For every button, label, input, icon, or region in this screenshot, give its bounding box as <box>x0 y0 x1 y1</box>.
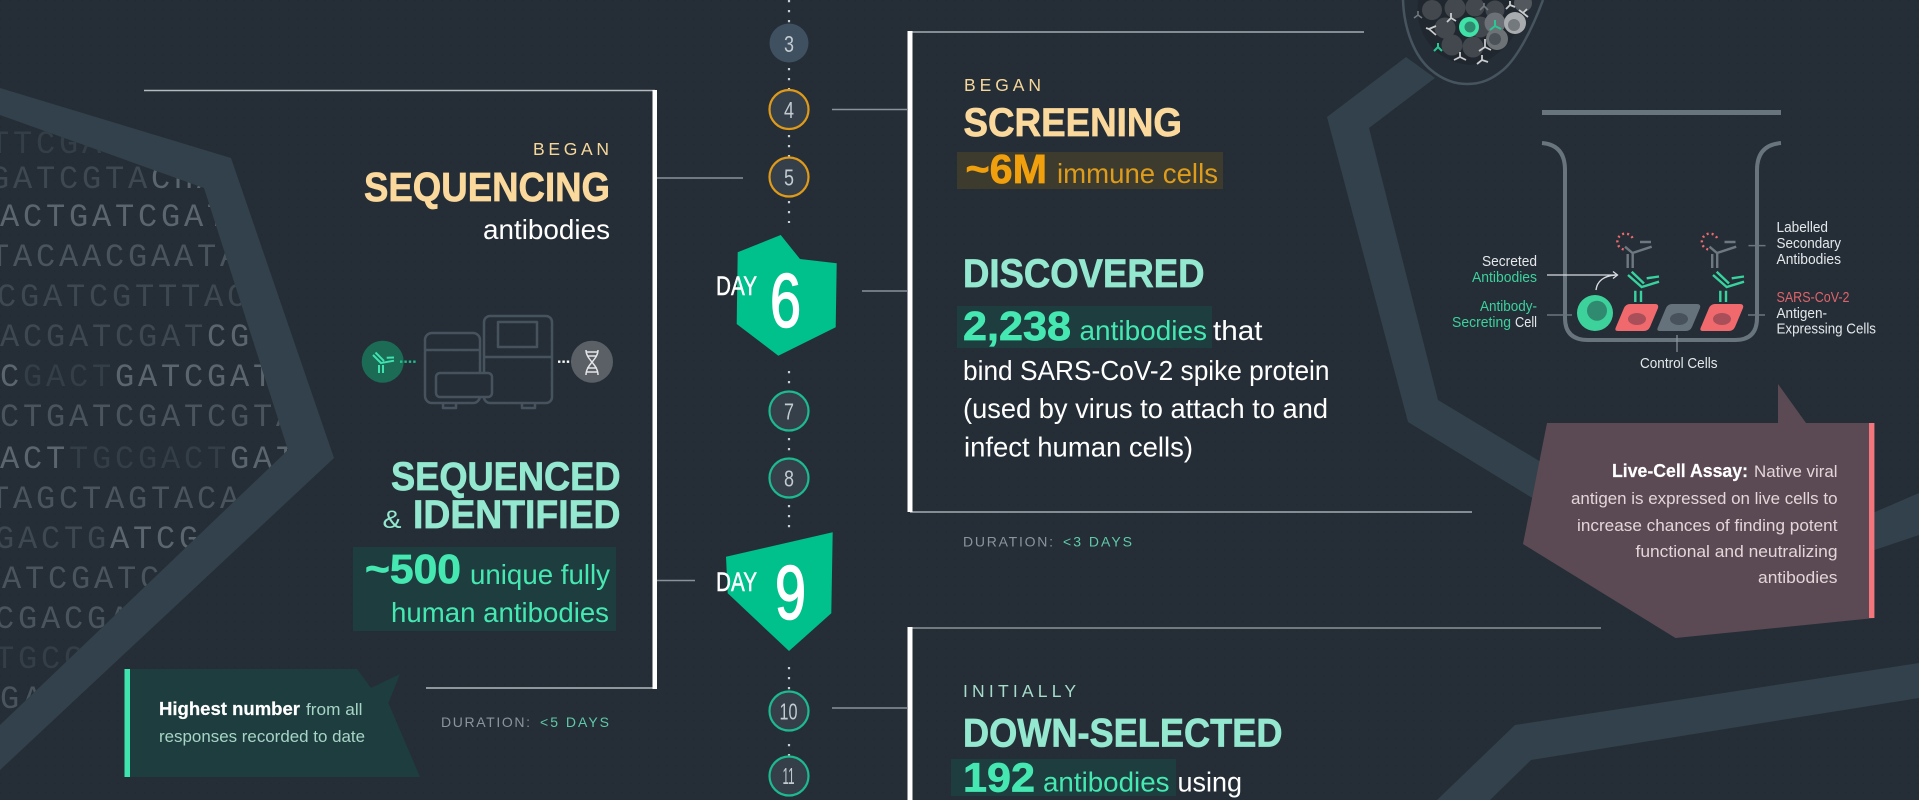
well lid <box>1542 110 1781 115</box>
label: secreted antibodies: Antibodies <box>1472 269 1537 286</box>
antibody-secreting cell <box>1577 275 1615 331</box>
duration: under 3 days: <3 DAYS <box>1063 534 1132 550</box>
label: antigen-expressing cells <box>1748 289 1876 338</box>
background band: right upper <box>1327 57 1919 606</box>
day 9 badge <box>716 532 833 651</box>
secondary antibodies <box>1625 242 1736 268</box>
label: antibody-secreting cell: Secreting <box>1452 314 1511 331</box>
label: antigen-expressing cells: SARS-CoV-2 <box>1776 289 1850 306</box>
duration: under 5 days: <5 DAYS <box>540 714 609 730</box>
DNA letters background: CTGATCGATCGTA <box>0 399 299 436</box>
text: spike protein description: that <box>1213 315 1263 346</box>
text: spike protein description: infect human cells) <box>964 432 1193 462</box>
label: labelled secondary antibodies <box>1748 219 1841 268</box>
DNA letters background: ACGATCGATCGT <box>0 319 276 356</box>
red labels on secondary antibodies <box>1617 234 1717 250</box>
callout: highest number <box>124 669 420 777</box>
DNA letters background: ACTTGCGACTGATC <box>0 441 322 478</box>
timeline dotted connectors <box>788 0 790 757</box>
day 5 marker <box>770 158 808 196</box>
heading: initially down-selected: INITIALLY <box>963 681 1076 701</box>
label: labelled secondary antibodies: Antibodies <box>1776 251 1841 268</box>
heading: sequenced and identified: SEQUENCED <box>391 455 620 499</box>
DNA letters background: ATCGATCC <box>2 561 186 598</box>
stat: 500 antibodies: human antibodies <box>391 597 609 628</box>
heading: began screening: SCREENING <box>964 101 1182 145</box>
label: labelled secondary antibodies: Labelled <box>1776 219 1828 236</box>
DNA letters background: CGATCGTTTACG <box>0 279 273 316</box>
label: control cells: Control Cells <box>1640 355 1718 372</box>
callout: live-cell assay: antibodies <box>1758 568 1838 587</box>
DNA letters background: ACTGATCGAT <box>0 199 230 236</box>
DNA letters background: GACTGATCGA <box>0 521 225 558</box>
day 10 marker: 10 <box>780 698 798 724</box>
day 7 marker <box>770 392 808 430</box>
heading: sequenced and identified <box>382 455 620 537</box>
heading: began sequencing: SEQUENCING <box>364 164 610 210</box>
label: labelled secondary antibodies: Secondary <box>1776 235 1841 252</box>
heading: began screening <box>964 75 1182 145</box>
heading: sequenced and identified: IDENTIFIED <box>413 493 620 537</box>
stat: 6M immune cells: ~6M <box>966 146 1047 192</box>
day 10 marker <box>770 692 808 730</box>
stat: 192 antibodies: antibodies <box>1043 766 1170 798</box>
text: spike protein description <box>963 315 1330 462</box>
label: antibody-secreting cell: Cell <box>1515 314 1537 331</box>
heading: sequenced and identified: & <box>382 506 402 534</box>
stat: 192 antibodies: 192 <box>963 754 1035 800</box>
stat: 192 antibodies: using <box>1178 766 1242 798</box>
stat: 2,238 antibodies: 2,238 <box>963 303 1071 349</box>
heading: began screening: BEGAN <box>964 75 1041 95</box>
day 11 marker <box>770 756 808 796</box>
timeline <box>716 0 837 796</box>
stat: 2,238 antibodies: antibodies <box>1080 315 1207 346</box>
label: antibody-secreting cell: Antibody- <box>1480 298 1537 315</box>
duration: under 5 days <box>441 714 609 730</box>
background band: left <box>0 88 334 770</box>
callout: live-cell assay: Native viral <box>1754 462 1838 481</box>
heading: began sequencing: BEGAN <box>533 139 609 159</box>
heading: initially down-selected <box>963 681 1282 756</box>
DNA letters background <box>0 132 288 708</box>
day 11 marker: 11 <box>782 763 794 789</box>
day 6 badge: 6 <box>770 259 801 344</box>
illustration: live-cell assay well <box>1452 110 1876 372</box>
green antibodies <box>1628 272 1744 302</box>
panel: screening and discovery <box>832 31 1472 550</box>
antigen-expressing cell 2 <box>1700 304 1743 331</box>
day 3 marker <box>770 24 808 62</box>
duration: under 5 days: DURATION: <box>441 714 530 730</box>
label: antibody-secreting cell <box>1452 298 1572 331</box>
text: spike protein description: bind SARS-CoV-2 spike protein <box>963 355 1330 386</box>
label: secreted antibodies <box>1472 253 1618 286</box>
duration: under 3 days: DURATION: <box>963 534 1053 550</box>
label: antigen-expressing cells: Antigen- <box>1776 305 1827 322</box>
day 7 marker: 7 <box>784 398 794 424</box>
callout: live-cell assay: antigen is expressed on live cells to <box>1571 489 1838 508</box>
well container <box>1542 143 1781 340</box>
day 8 marker <box>770 458 808 498</box>
callout: highest number: responses recorded to date <box>159 727 365 746</box>
antigen-expressing cell 1 <box>1615 304 1658 331</box>
day 5 marker: 5 <box>784 164 794 190</box>
callout: live-cell assay: Live-Cell Assay: <box>1612 461 1748 481</box>
icon: sequencer machine <box>425 316 552 408</box>
stat: 192 antibodies <box>951 754 1242 800</box>
stat: 6M immune cells <box>957 146 1223 192</box>
stat: 500 antibodies: unique fully <box>470 559 610 590</box>
heading: began sequencing: antibodies <box>483 214 610 245</box>
duration: under 3 days <box>963 534 1132 550</box>
icon: DNA in gray circle <box>558 341 613 383</box>
stat: 6M immune cells: immune cells <box>1057 158 1218 189</box>
DNA letters background: GA <box>0 681 46 718</box>
illustration: cell dish <box>1403 0 1543 84</box>
panel: sequencing <box>144 90 743 730</box>
text: spike protein description: (used by virus to attach to and <box>963 393 1328 424</box>
day 9 badge: DAY <box>716 567 757 597</box>
label: antigen-expressing cells: Expressing Cells <box>1776 320 1876 338</box>
callout: live-cell assay: functional and neutralizing <box>1636 542 1838 561</box>
day 9 badge: 9 <box>775 551 806 636</box>
day 6 badge <box>716 235 837 356</box>
day 4 marker <box>770 90 808 129</box>
callout: live-cell assay <box>1523 384 1874 638</box>
heading: initially down-selected: DOWN-SELECTED <box>963 712 1282 756</box>
panel: down-selection <box>832 627 1601 800</box>
DNA letters background: CGACTGATCGAT <box>0 359 276 396</box>
callout: live-cell assay: increase chances of finding potent <box>1577 516 1838 535</box>
callout: highest number: Highest number <box>159 699 300 719</box>
icon: antibody in green circle <box>362 341 417 383</box>
day 4 marker: 4 <box>784 97 794 123</box>
day 8 marker: 8 <box>784 466 794 492</box>
heading: began sequencing <box>364 139 610 245</box>
control cell <box>1657 304 1700 331</box>
stat: 2,238 antibodies <box>957 303 1212 349</box>
day 6 badge: DAY <box>716 271 757 301</box>
day 3 marker: 3 <box>784 31 794 57</box>
background band: bottom right <box>1437 663 1919 800</box>
label: secreted antibodies: Secreted <box>1482 253 1537 270</box>
callout: highest number: from all <box>306 700 362 719</box>
heading: discovered: DISCOVERED <box>963 252 1204 296</box>
stat: 500 antibodies <box>353 546 616 631</box>
stat: 500 antibodies: ~500 <box>365 546 461 592</box>
label: control cells <box>1640 335 1718 372</box>
